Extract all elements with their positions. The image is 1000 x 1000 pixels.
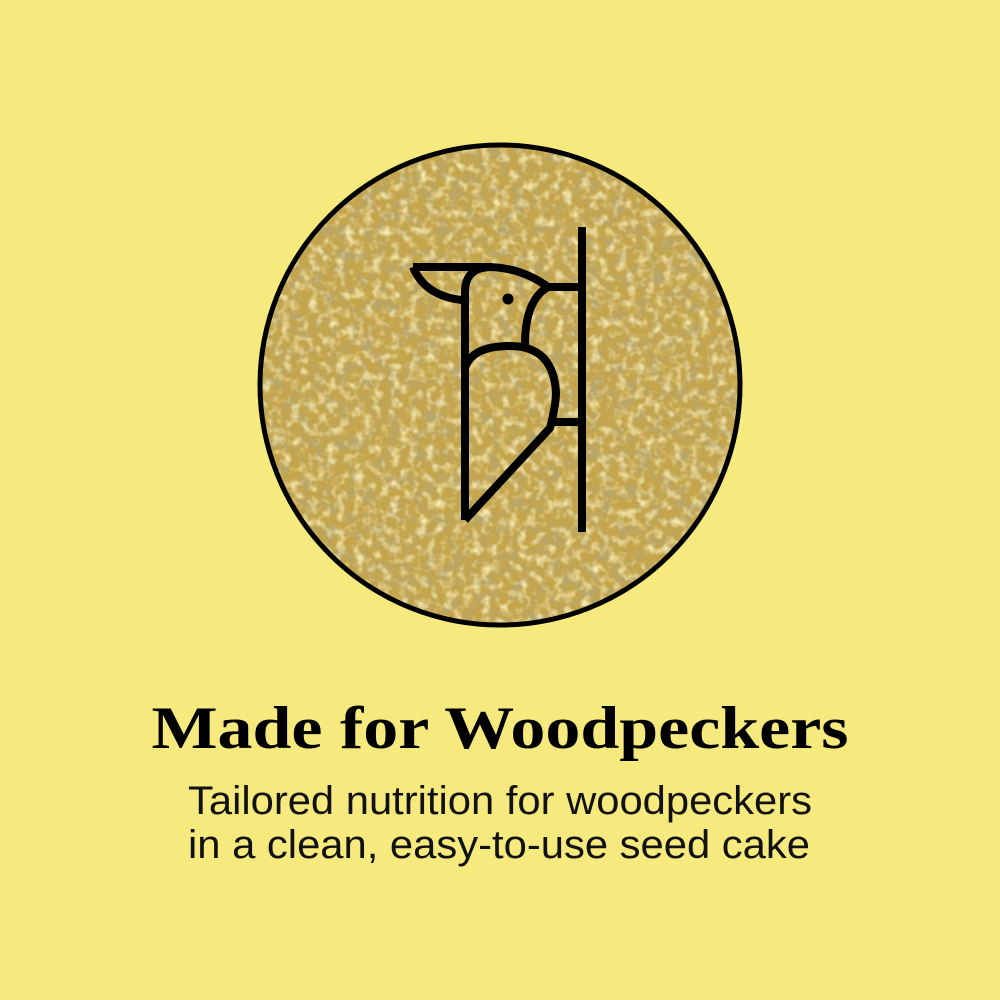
subtitle: in a clean, easy-to-use seed cake <box>188 823 810 867</box>
title: Made for Woodpeckers <box>152 695 848 761</box>
icon: woodpecker <box>413 227 582 532</box>
subtitle <box>188 779 812 867</box>
infographic <box>152 142 847 866</box>
icon: tree trunk <box>552 227 582 532</box>
seed circle <box>258 143 742 627</box>
subtitle: Tailored nutrition for woodpeckers <box>188 779 812 823</box>
